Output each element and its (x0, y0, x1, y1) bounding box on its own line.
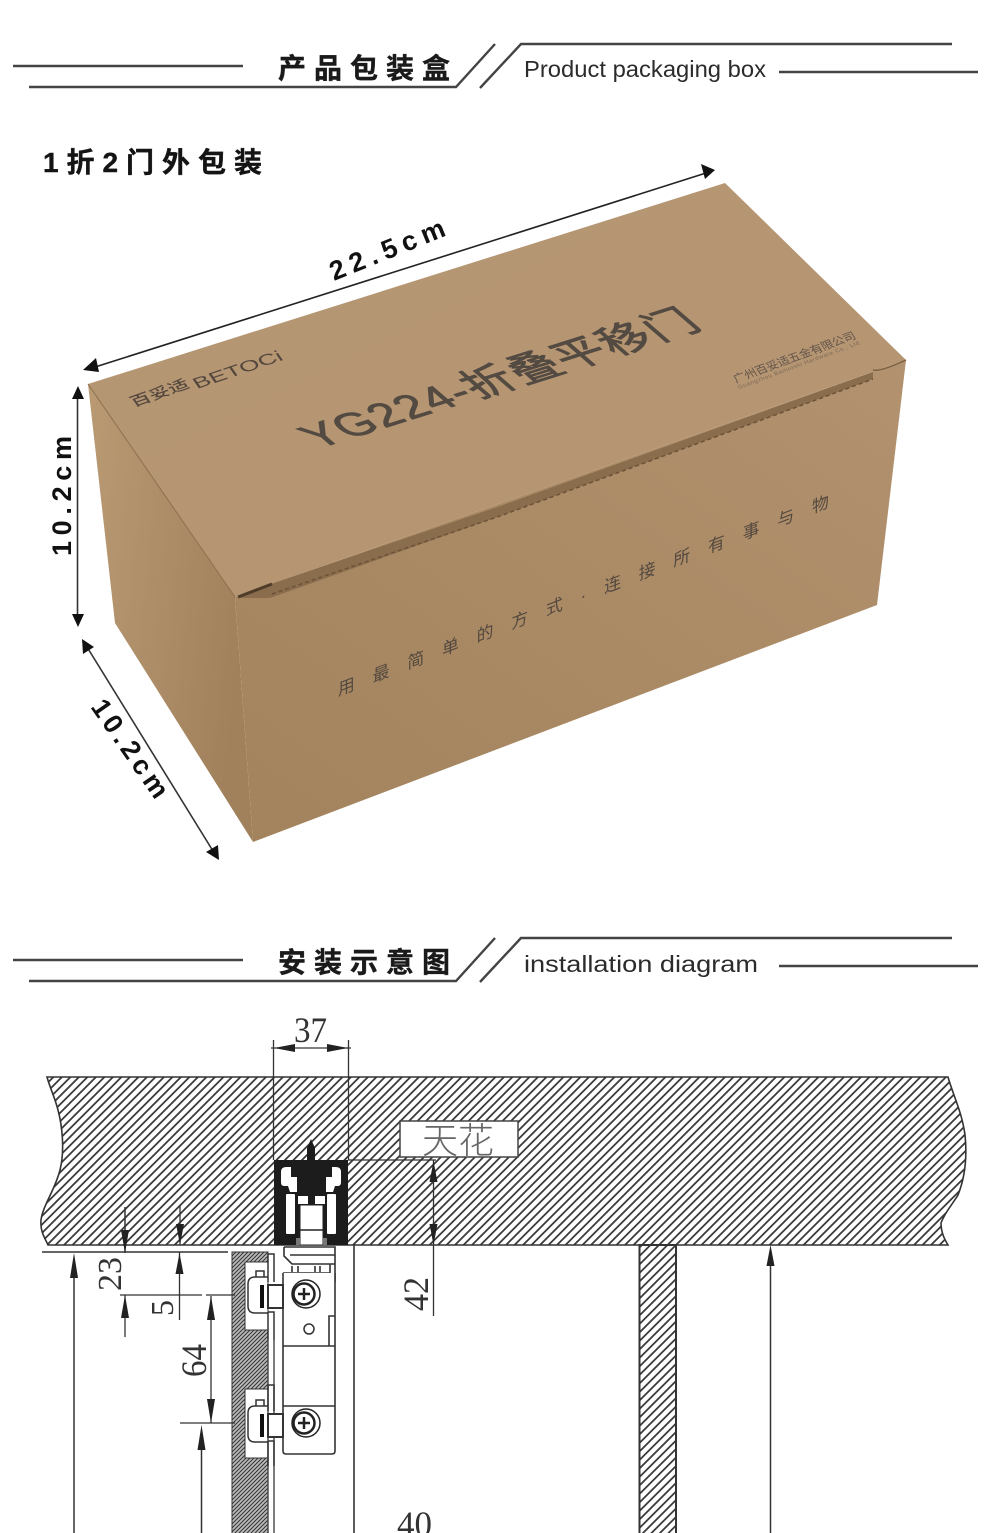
box brand logo: BETOCi (189, 347, 287, 392)
partition wall (640, 1245, 676, 1533)
box brand logo (127, 347, 287, 410)
dimension 64 (120, 1295, 235, 1423)
dimension 64: 64 (174, 1344, 214, 1377)
dimension 23 (42, 1207, 228, 1337)
dimension 37: 37 (294, 1010, 327, 1050)
hinge mount plate (283, 1247, 335, 1454)
heading: installation diagram: 安装示意图 (278, 947, 450, 978)
track channel (274, 1139, 348, 1245)
hinge screw lower (292, 1409, 320, 1437)
arrow: left height reference (70, 1253, 78, 1533)
hinge screw upper (292, 1280, 320, 1308)
dimension: height 10.2cm: 10.2cm (47, 436, 77, 556)
dimension: length 22.5cm: 22.5cm (325, 213, 449, 287)
dimension: depth 10.2cm (82, 639, 219, 860)
dimension 42: 42 (396, 1277, 436, 1311)
box model name: YG224-折叠平移门 (288, 302, 711, 455)
box front face (235, 360, 906, 842)
dimension: depth 10.2cm: 10.2cm (85, 693, 175, 804)
dimension 42 (396, 1160, 438, 1316)
dimension 23: 23 (92, 1257, 129, 1291)
box company name: 广州百妥适五金有限公司 (730, 329, 858, 385)
heading: product packaging box: 产品包装盒 (278, 53, 450, 84)
dimension 5 (144, 1205, 184, 1320)
product photo: cardboard box (88, 183, 906, 842)
channel side lines (274, 1040, 436, 1160)
dimension: length 22.5cm (83, 164, 715, 372)
box top face (88, 183, 906, 597)
hinge arm lower (248, 1385, 283, 1466)
dimension 5: 5 (144, 1300, 180, 1316)
heading: installation diagram (13, 938, 978, 982)
door leaf (232, 1252, 274, 1533)
hinge centre hole (304, 1324, 314, 1334)
hinge arm upper (248, 1254, 283, 1340)
ceiling label (400, 1120, 518, 1161)
box company name: Guangzhou Baituoshi Hardware Co., Ltd (737, 341, 861, 391)
dimension: height 10.2cm (47, 386, 84, 627)
ceiling label: 天花 (422, 1120, 494, 1161)
box brand logo: 百妥适 (127, 377, 193, 410)
dimension 37 (271, 1010, 351, 1052)
box flap fold (238, 372, 873, 598)
heading: product packaging box: Product packaging box (524, 56, 767, 82)
heading: product packaging box (13, 44, 978, 88)
ceiling slab section (41, 1077, 966, 1245)
arrow: right height reference (766, 1245, 774, 1533)
box slogan: 用最简单的方式·连接所有事与物 (338, 491, 829, 700)
subtitle: 1 fold 2 door outer packaging: 1折2门外包装 (43, 147, 262, 178)
box left face (88, 384, 253, 842)
line: door clearance (353, 1245, 355, 1533)
installation technical drawing (41, 1010, 966, 1533)
heading: installation diagram: installation diagram (524, 951, 758, 977)
arrow: hinge height reference (198, 1425, 206, 1533)
